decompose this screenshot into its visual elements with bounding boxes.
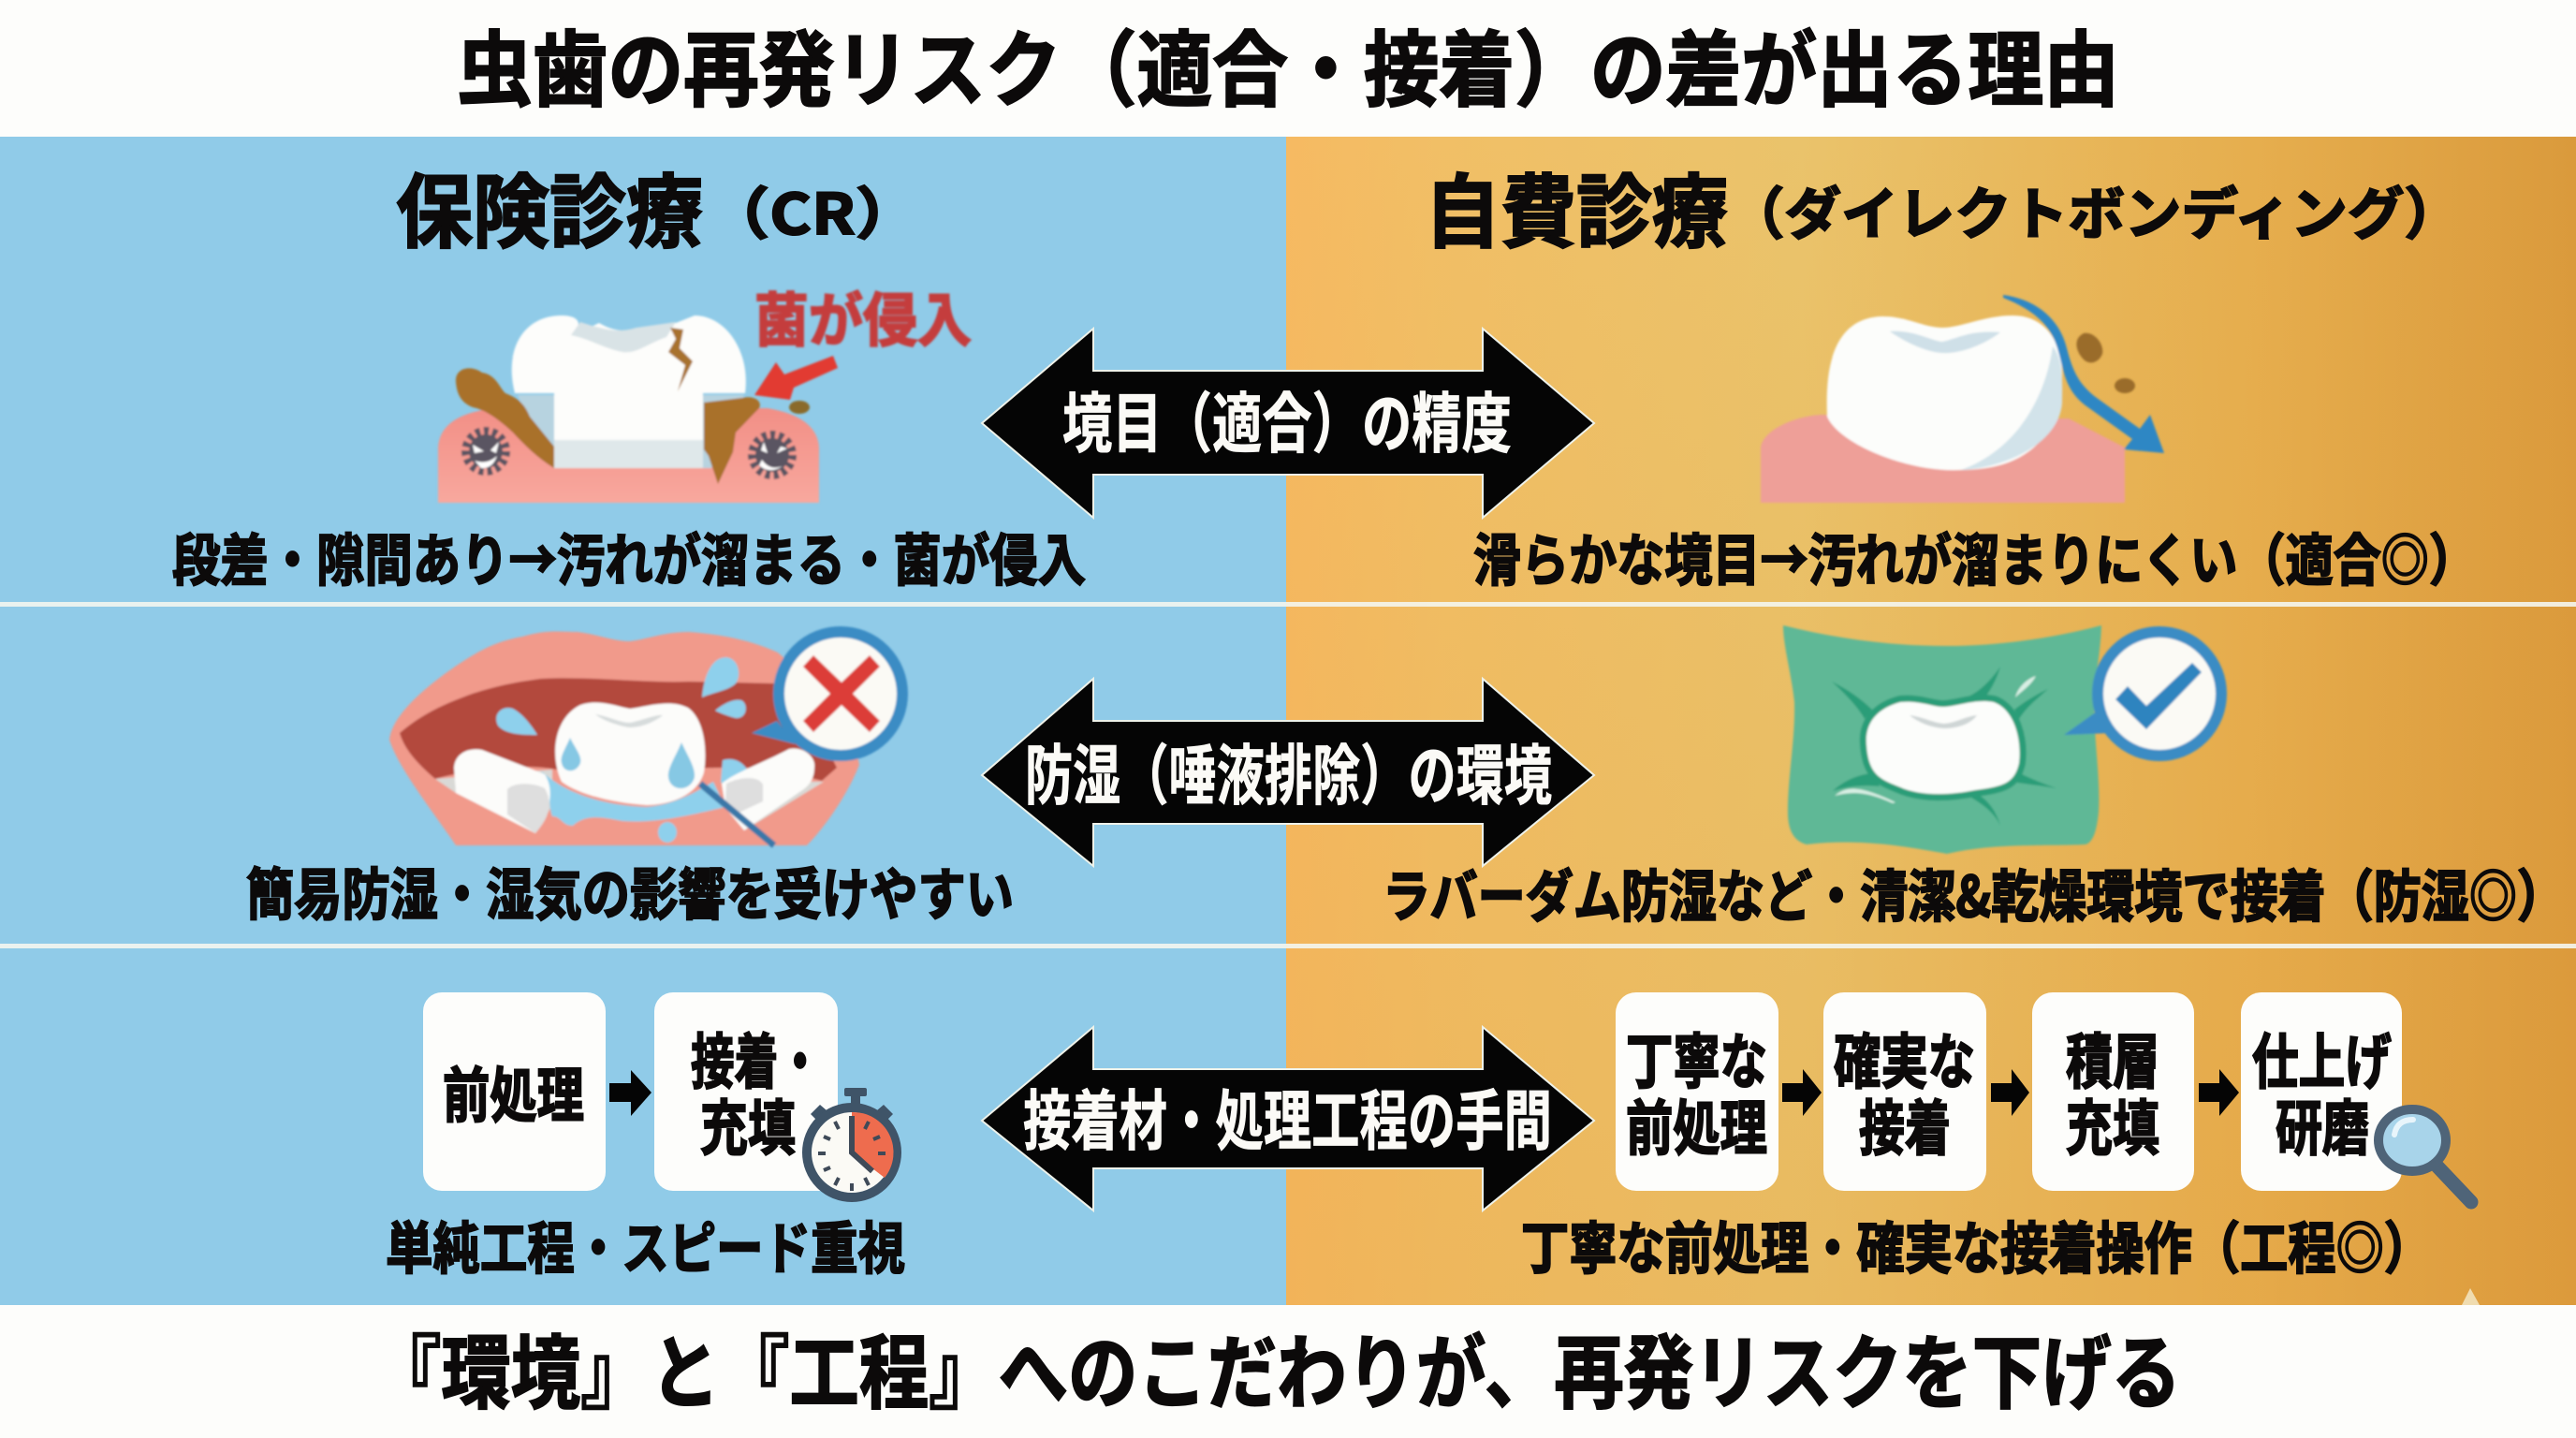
double arrow: margin accuracy: 境目（適合）の精度 [1062,372,1512,466]
gum [438,408,819,503]
heading: insurance care [396,147,919,264]
step box: reliable bonding [1823,992,1986,1191]
tooth [1866,701,2020,794]
double arrow: moisture control [982,679,1594,866]
heading: insurance care: 保険診療 [396,147,703,264]
badge: check [2064,632,2221,756]
step box: careful pre-treatment [1616,992,1778,1191]
droplet top [702,657,739,697]
tooth shade [1961,346,2062,470]
double arrow: adhesive and process effort [982,1027,1594,1211]
illustration: rubber dam [1783,625,2221,854]
step box: careful pre-treatment: 丁寧な [1626,1015,1767,1101]
crack [668,328,693,391]
step box: layered filling: 積層 [2066,1015,2159,1101]
heading: self-pay care: 自費診療 [1425,147,1728,264]
plaque particles [2076,333,2102,362]
step box: reliable bonding: 確実な [1834,1015,1975,1101]
icon: magnifier [2378,1109,2471,1202]
lips [389,631,859,845]
dam sheet [1783,625,2101,854]
sheet highlights [1835,676,2036,803]
dam spikes [1832,667,2056,826]
right tooth [722,749,814,830]
worn occlusal surface [571,322,676,352]
occlusal groove [1910,715,1977,728]
gap shading [518,395,744,468]
plaque right [704,397,760,484]
droplet falling [658,822,677,843]
title: 虫歯の再発リスク（適合・接着）の差が出る理由 [457,5,2119,124]
occlusal groove [1890,331,2000,353]
step box: finishing and polishing: 仕上げ [2252,1015,2392,1101]
step box: layered filling [2032,992,2194,1191]
step box: bond and fill: 接着・ [691,1015,822,1101]
tooth crown [512,315,746,393]
double arrow: margin accuracy [982,329,1594,518]
panel: self-pay side background [1286,137,2576,1305]
droplet left [496,708,537,735]
icon: stopwatch [807,1088,897,1197]
tooth root [554,393,703,468]
heading: self-pay care [1425,147,2461,264]
heading: self-pay care: （ダイレクトボンディング） [1728,169,2461,251]
illustration: mouth with moisture [389,631,902,845]
red arrow [754,356,838,400]
tooth [1827,315,2062,470]
arrow: left step [609,1070,651,1116]
step box: finishing and polishing: 研磨 [2276,1081,2369,1167]
bottom conclusion: 『環境』と『工程』へのこだわりが、再発リスクを下げる [372,1308,2181,1425]
suction tube [700,784,774,845]
caption: row 1 left: 段差・隙間あり→汚れが溜まる・菌が侵入 [172,516,1086,597]
step box: bond and fill [654,992,838,1191]
dam ring [1866,701,2020,794]
double arrow: adhesive and process effort: 接着材・処理工程の手間 [1023,1069,1552,1164]
occlusal groove [595,714,663,727]
badge: cross [752,632,902,756]
gum [1761,415,2125,503]
step box: careful pre-treatment: 前処理 [1626,1081,1767,1167]
plaque left [456,368,554,468]
plaque speck [789,401,810,414]
step box: layered filling: 充填 [2066,1081,2159,1167]
lower gum strip [435,770,824,833]
bacterium right [753,435,792,475]
arrow: step 1 to 2 [1782,1069,1822,1116]
double arrow: moisture control: 防湿（唾液排除）の環境 [1025,724,1552,818]
caption: row 3 right: 丁寧な前処理・確実な接着操作（工程◎） [1521,1204,2432,1285]
saliva pool [541,770,725,826]
heading: insurance care: （CR） [706,169,919,251]
step box: bond and fill: 充填 [700,1081,796,1167]
arrow: step 2 to 3 [1991,1069,2029,1116]
illustration: decayed tooth with gaps and bacteria [438,289,972,503]
step box: finishing and polishing [2241,992,2402,1191]
tooth droplet left [562,738,580,770]
tooth droplet right [668,742,695,788]
caption: row 3 left: 単純工程・スピード重視 [386,1204,905,1285]
panel: insurance side background [0,137,1286,1305]
mouth interior [400,678,837,781]
left tooth [454,749,550,833]
arrow: step 3 to 4 [2199,1069,2239,1116]
step box: reliable bonding: 接着 [1859,1081,1951,1167]
label: bacteria enter: 菌が侵入 [754,289,972,354]
step box: pre-treatment [423,992,606,1191]
caption: row 2 left: 簡易防湿・湿気の影響を受けやすい [246,850,1014,932]
illustration: smooth margin tooth [1761,295,2164,503]
bacterium left [466,432,505,471]
blue flow arrow [2003,295,2164,453]
droplet mid [715,700,746,718]
central tooth [555,702,705,805]
step box: pre-treatment: 前処理 [443,1049,584,1135]
